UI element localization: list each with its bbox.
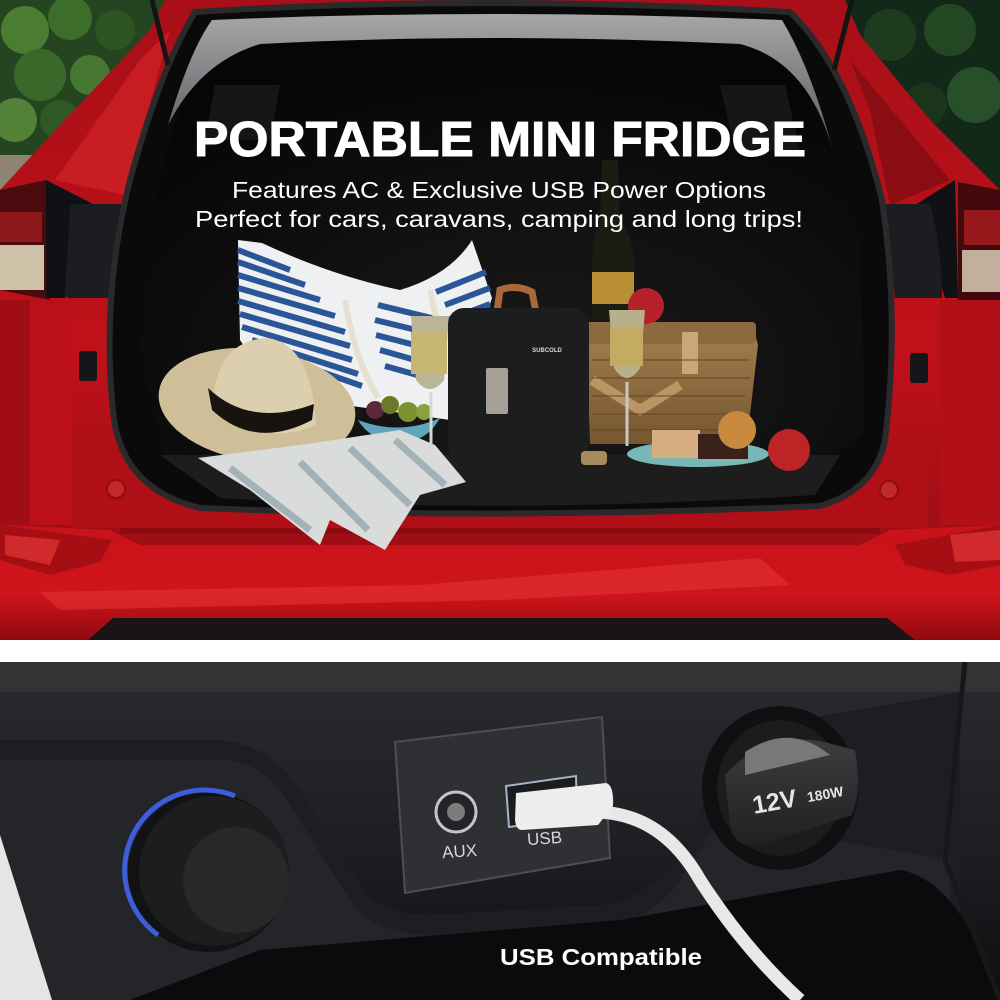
title: PORTABLE MINI FRIDGE: [194, 113, 806, 167]
black trim panels: [46, 180, 958, 298]
left tail light: [0, 180, 112, 575]
foliage background left: [0, 0, 170, 190]
subtitle: [195, 177, 803, 232]
blanket stripes: [230, 440, 445, 530]
boot interior: [140, 30, 865, 460]
rear seats in the dark: [205, 85, 800, 150]
USB cable plug: [515, 783, 800, 1000]
striped beach bag: [238, 240, 492, 420]
bolts: [107, 480, 898, 499]
white cable left edge: [0, 835, 52, 1000]
tailgate lining: [168, 14, 834, 155]
USB port: [506, 776, 577, 827]
car body panels: [0, 0, 1000, 640]
subtitle: Perfect for cars, caravans, camping and long trips!: [195, 206, 803, 232]
wine cork: [581, 451, 607, 465]
panel: car boot photo: [0, 0, 1000, 640]
console recess: [0, 692, 960, 1000]
apple on basket: [628, 288, 664, 324]
right-side panel line: [945, 662, 1000, 1000]
foliage background right: [840, 0, 1000, 190]
plate with cake: [627, 411, 769, 467]
12V label: 12V: [750, 784, 799, 820]
blue-lit power button: [125, 790, 289, 952]
subtitle: Features AC & Exclusive USB Power Options: [232, 177, 766, 203]
left champagne glass: [411, 316, 449, 448]
12V socket: [702, 706, 858, 870]
AUX port: [436, 792, 476, 832]
striped blanket: [198, 430, 466, 550]
right champagne glass: [609, 310, 645, 446]
panel: car USB console photo: [0, 662, 1000, 1000]
fridge brand label: SUBCOLD: [532, 348, 562, 354]
straw hat: [151, 336, 363, 474]
black mini fridge: [448, 287, 589, 462]
champagne bottle: [592, 160, 634, 320]
latches: [79, 351, 928, 383]
tailgate struts: [152, 0, 852, 70]
right tail light: [895, 182, 1000, 575]
grape bowl: [358, 396, 440, 442]
USB label: USB: [527, 828, 563, 849]
bumper: [0, 525, 1000, 640]
AUX and USB socket plate: [395, 717, 610, 893]
red apple: [768, 429, 810, 471]
boot floor mat: [160, 455, 840, 506]
AUX label: AUX: [442, 841, 478, 862]
wicker picnic basket: [584, 322, 758, 444]
180W label: 180W: [806, 783, 845, 805]
boot opening: [110, 3, 892, 514]
USB compatible caption: USB Compatible: [500, 944, 702, 970]
